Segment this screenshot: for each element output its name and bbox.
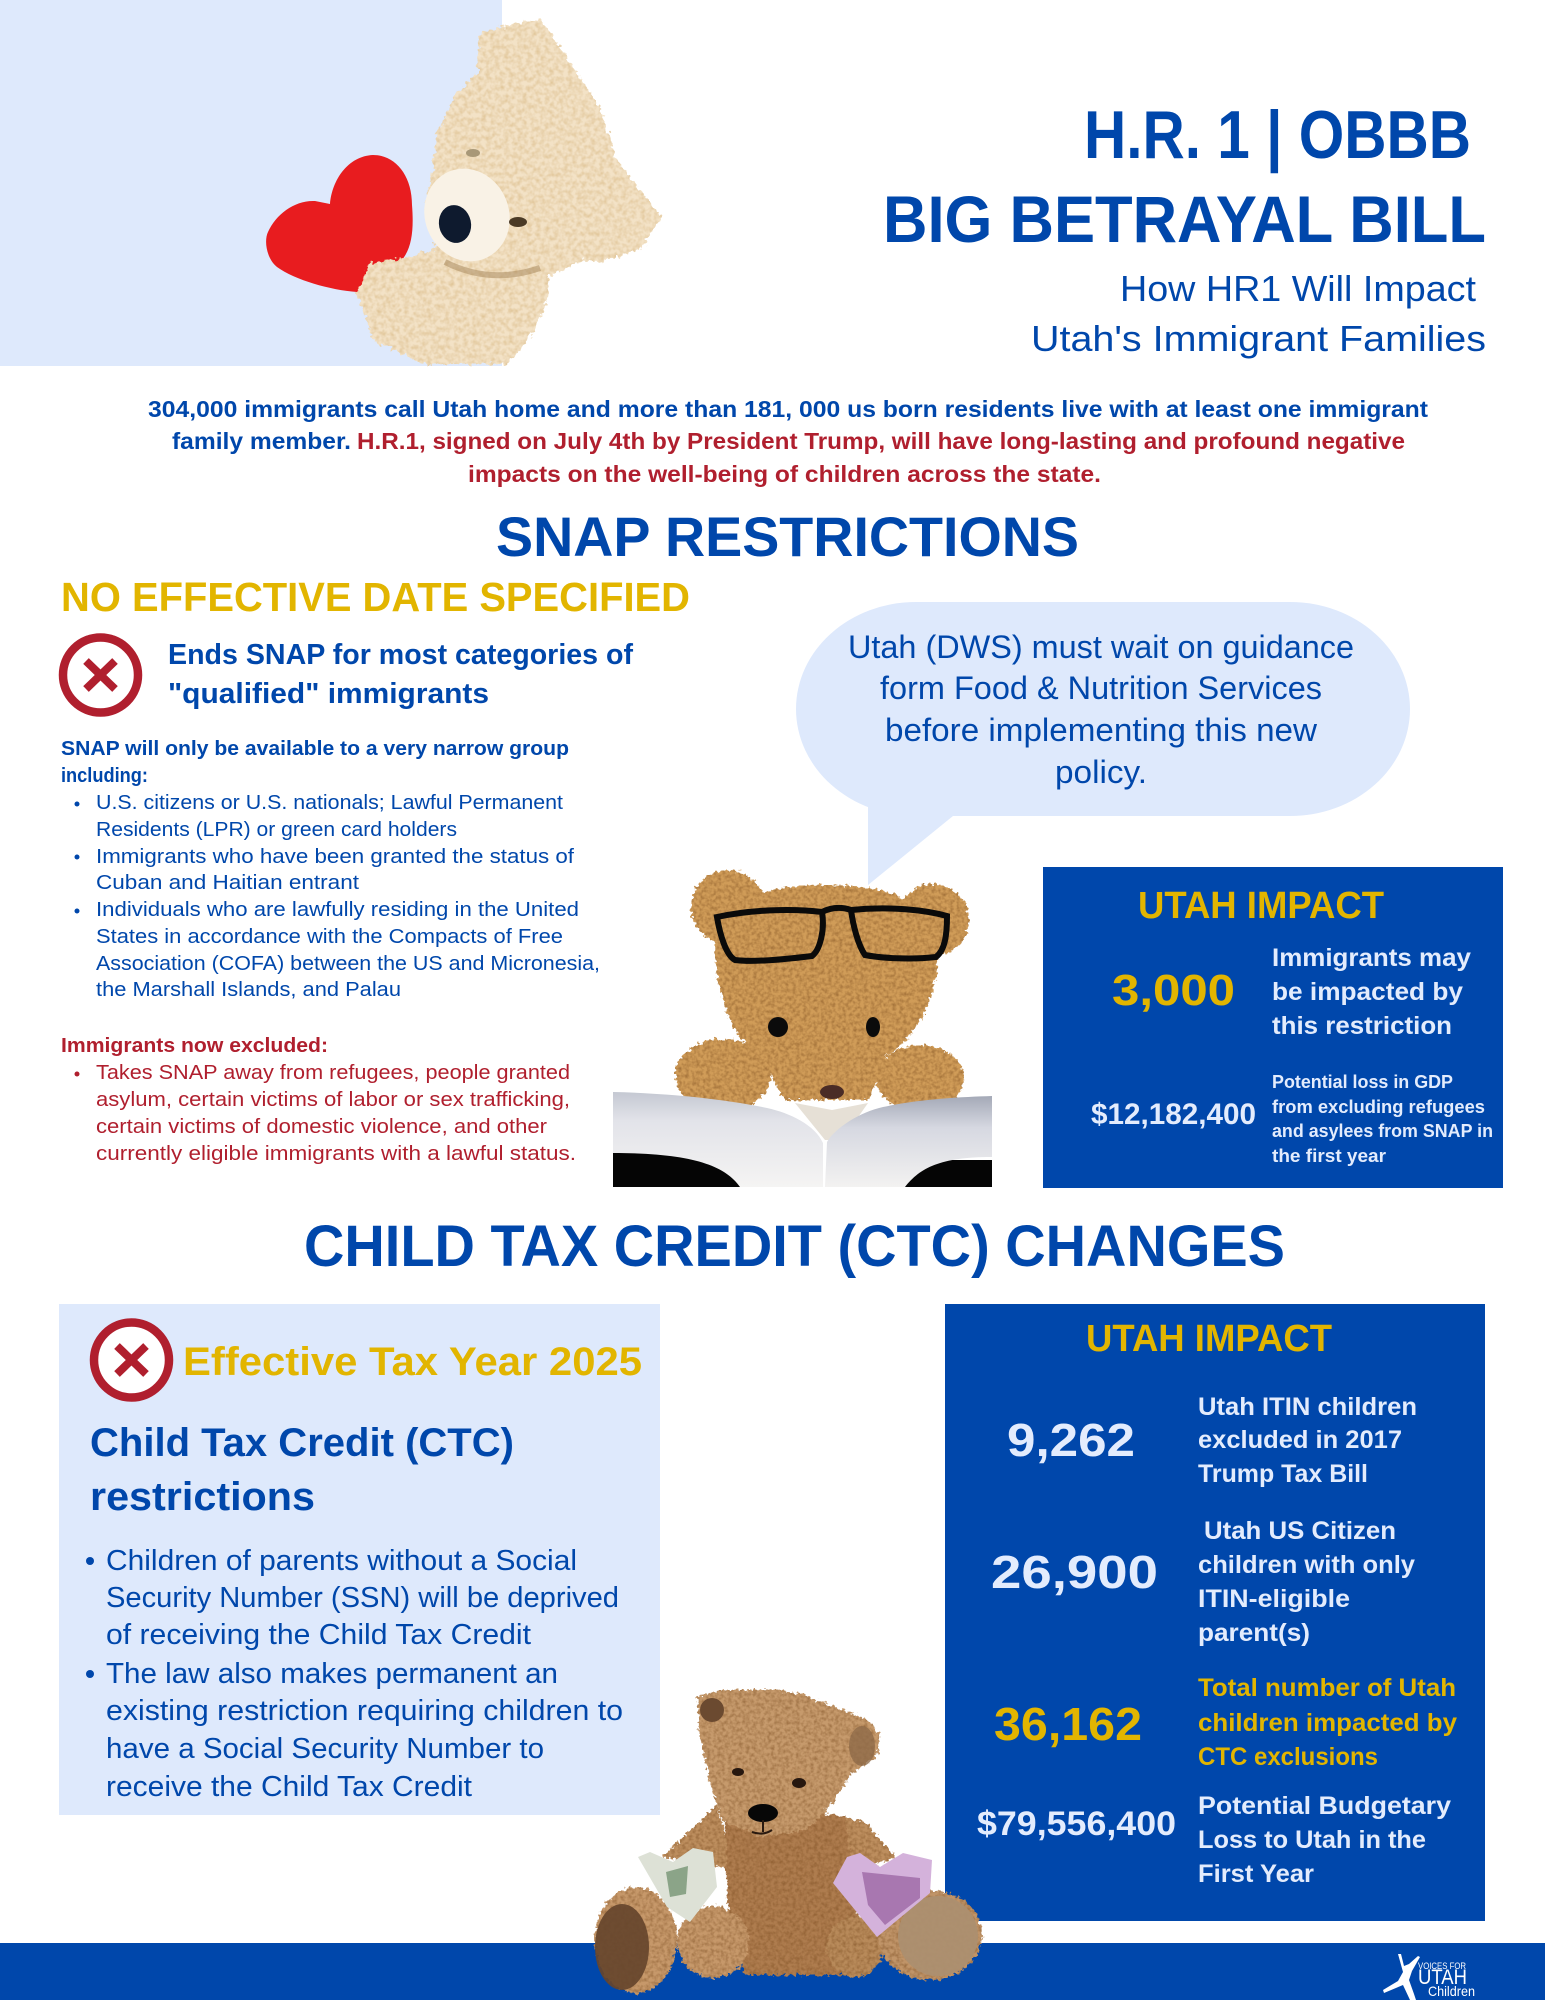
title	[883, 97, 1486, 359]
heading: no effective date specified: NO EFFECTIVE DATE SPECIFIED	[61, 574, 690, 620]
title line 1: H.R. 1 | OBBB	[1084, 97, 1471, 174]
SNAP eligibility text: Cuban and Haitian entrant	[96, 872, 359, 894]
SNAP eligibility text: Individuals who are lawfully residing in the United	[96, 899, 579, 921]
bullet list: have a Social Security Number to	[106, 1733, 544, 1765]
stat: 9,262: 9,262	[1007, 1414, 1135, 1466]
SNAP eligibility text: Immigrants who have been granted the status of	[96, 846, 574, 868]
GDP loss description: Potential loss in GDP	[1272, 1072, 1453, 1092]
stat: GDP loss: $12,182,400	[1091, 1098, 1256, 1131]
header: light blue panel	[0, 0, 502, 366]
stat: budget loss: $79,556,400	[977, 1805, 1176, 1843]
9,262 description: excluded in 2017	[1198, 1426, 1402, 1454]
GDP loss description: and asylees from SNAP in	[1272, 1121, 1493, 1141]
stat description: Immigrants may	[1272, 944, 1471, 972]
icon: red X in circle	[94, 1322, 169, 1398]
budget loss description: Loss to Utah in the	[1198, 1826, 1426, 1854]
GDP loss description: the first year	[1272, 1146, 1386, 1166]
immigrants now excluded text	[61, 1035, 576, 1165]
budget loss description: Potential Budgetary	[1198, 1792, 1451, 1820]
SNAP eligibility text: including:	[61, 765, 148, 787]
36,162 description: children impacted by	[1198, 1709, 1457, 1737]
logo figure	[1383, 1954, 1420, 2000]
speech bubble: Utah (DWS) must wait on guidance	[848, 629, 1354, 665]
immigrants now excluded text: certain victims of domestic violence, and other	[96, 1116, 547, 1138]
stat: 3,000: 3,000	[1112, 966, 1235, 1015]
intro paragraph: 304,000 immigrants call Utah home and more than 181, 000 us born residents live with at least one immigrant	[148, 396, 1428, 422]
speech bubble	[796, 602, 1410, 885]
immigrants now excluded text: Takes SNAP away from refugees, people granted	[96, 1062, 570, 1084]
GDP loss description	[1272, 1072, 1493, 1166]
SNAP subheading: "qualified" immigrants	[168, 678, 489, 710]
bullet list	[86, 1545, 623, 1803]
SNAP subheading	[168, 639, 633, 710]
SNAP eligibility text: Residents (LPR) or green card holders	[96, 819, 457, 841]
SNAP eligibility text: U.S. citizens or U.S. nationals; Lawful Permanent	[96, 792, 563, 814]
bullet list: receive the Child Tax Credit	[106, 1771, 472, 1803]
stat description: be impacted by	[1272, 978, 1463, 1006]
illustration: teddy bear holding money hearts	[595, 1690, 982, 1993]
bullet list: The law also makes permanent an	[106, 1658, 558, 1690]
stat: 36,162: 36,162	[994, 1698, 1142, 1750]
logo text	[1418, 1961, 1475, 1999]
heading: child tax credit changes: CHILD TAX CREDIT (CTC) CHANGES	[304, 1214, 1285, 1279]
stat: 26,900: 26,900	[991, 1546, 1158, 1598]
intro paragraph	[148, 396, 1428, 487]
panel subheading: Child Tax Credit (CTC)	[90, 1421, 514, 1465]
bullet list: Security Number (SSN) will be deprived	[106, 1582, 619, 1614]
bullet list: existing restriction requiring children to	[106, 1695, 623, 1727]
SNAP eligibility text: Association (COFA) between the US and Micronesia,	[96, 953, 600, 975]
panel: Utah impact CTC	[945, 1304, 1485, 1921]
illustration: teddy bear reading with glasses	[613, 870, 992, 1187]
SNAP eligibility text	[61, 738, 600, 1001]
9,262 description	[1198, 1393, 1417, 1488]
budget loss description: First Year	[1198, 1860, 1314, 1888]
9,262 description: Utah ITIN children	[1198, 1393, 1417, 1421]
logo text: UTAH	[1418, 1966, 1467, 1989]
GDP loss description: from excluding refugees	[1272, 1097, 1485, 1117]
intro paragraph: family member.	[172, 428, 351, 454]
speech bubble: form Food & Nutrition Services	[880, 670, 1322, 706]
SNAP eligibility text: SNAP will only be available to a very narrow group	[61, 738, 569, 760]
illustration: teddy bear with red heart	[266, 18, 662, 364]
26,900 description: parent(s)	[1198, 1619, 1310, 1647]
stat description	[1272, 944, 1471, 1040]
icon: red X in circle	[63, 638, 138, 712]
SNAP eligibility text: States in accordance with the Compacts of Free	[96, 926, 563, 948]
title line 2: BIG BETRAYAL BILL	[883, 182, 1486, 256]
intro paragraph: impacts on the well-being of children across the state.	[468, 461, 1101, 487]
subtitle line 2: Utah's Immigrant Families	[1031, 318, 1486, 359]
panel: Utah impact SNAP	[1043, 867, 1503, 1188]
26,900 description: Utah US Citizen	[1204, 1517, 1396, 1545]
immigrants now excluded text: currently eligible immigrants with a lawful status.	[96, 1143, 576, 1165]
speech bubble: before implementing this new	[885, 712, 1318, 748]
SNAP subheading: Ends SNAP for most categories of	[168, 639, 633, 671]
heading: SNAP restrictions: SNAP RESTRICTIONS	[496, 505, 1079, 568]
immigrants now excluded text: Immigrants now excluded:	[61, 1035, 328, 1057]
panel subheading: restrictions	[90, 1475, 315, 1519]
effective date: Effective Tax Year 2025	[183, 1340, 642, 1384]
36,162 description	[1198, 1674, 1457, 1771]
26,900 description	[1198, 1517, 1415, 1647]
stat description: this restriction	[1272, 1012, 1452, 1040]
logo text: VOICES FOR	[1418, 1961, 1466, 1971]
logo: Voices for Utah Children	[1383, 1954, 1475, 2000]
36,162 description: Total number of Utah	[1198, 1674, 1456, 1702]
immigrants now excluded text: asylum, certain victims of labor or sex trafficking,	[96, 1089, 570, 1111]
panel heading: UTAH IMPACT	[1086, 1318, 1332, 1360]
speech bubble: policy.	[1055, 754, 1147, 790]
26,900 description: children with only	[1198, 1551, 1415, 1579]
panel subheading	[90, 1421, 514, 1519]
panel: CTC restrictions	[59, 1304, 660, 1815]
footer band	[0, 1943, 1545, 2000]
bullet list: Children of parents without a Social	[106, 1545, 577, 1577]
subtitle line 1: How HR1 Will Impact	[1120, 268, 1476, 309]
budget loss description	[1198, 1792, 1451, 1888]
9,262 description: Trump Tax Bill	[1198, 1460, 1368, 1488]
SNAP eligibility text: the Marshall Islands, and Palau	[96, 979, 401, 1001]
bullet list: of receiving the Child Tax Credit	[106, 1619, 531, 1651]
panel heading: UTAH IMPACT	[1138, 885, 1384, 927]
36,162 description: CTC exclusions	[1198, 1743, 1378, 1771]
intro paragraph: H.R.1, signed on July 4th by President Trump, will have long-lasting and profound negative	[357, 428, 1405, 454]
logo text: Children	[1428, 1983, 1475, 1999]
26,900 description: ITIN-eligible	[1198, 1585, 1350, 1613]
